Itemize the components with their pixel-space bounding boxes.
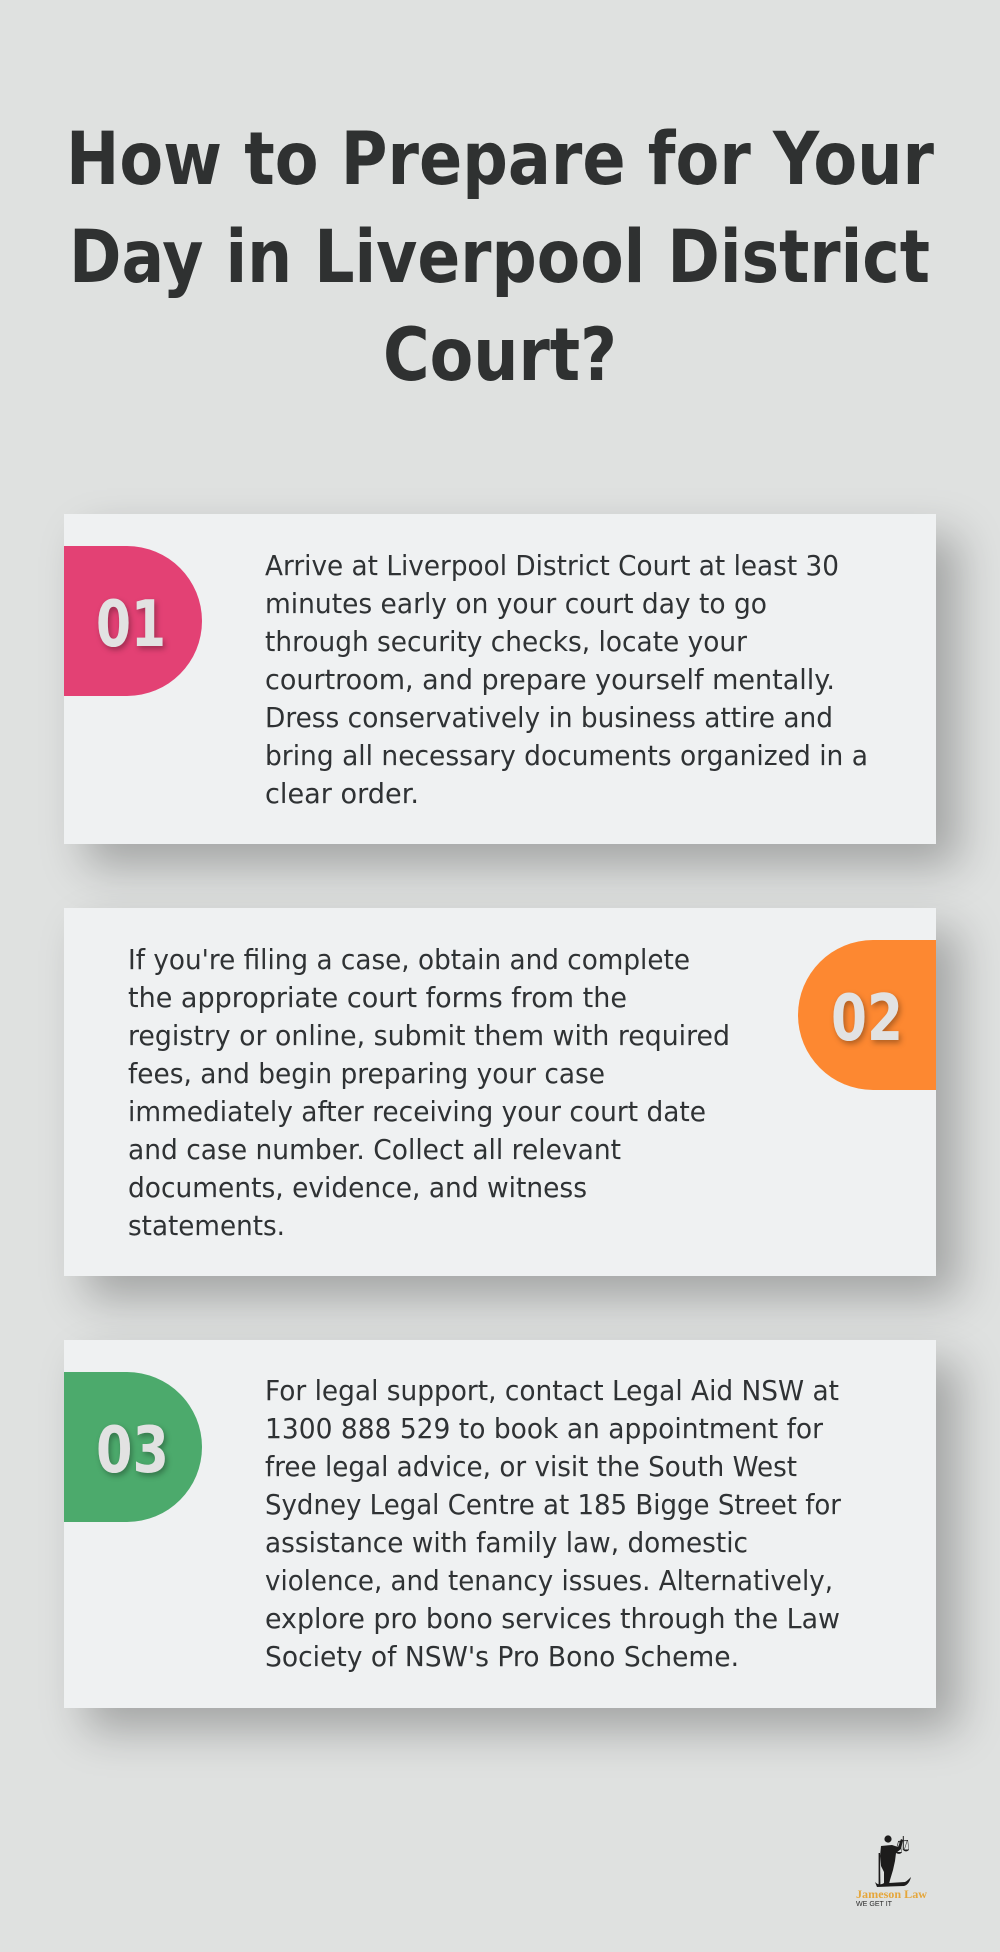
brand name: Jameson Law <box>856 1889 928 1901</box>
text block: step 03: 1300 888 529 to book an appointment for <box>265 1413 824 1445</box>
badge: 01: 01 <box>96 588 166 662</box>
text block: step 03: assistance with family law, domestic <box>265 1527 748 1559</box>
panel: step 03 <box>64 1340 936 1708</box>
panel: step 02 <box>64 908 936 1276</box>
text block: step 01 <box>265 550 868 810</box>
text block: step 02: documents, evidence, and witness <box>128 1172 587 1204</box>
text block: step 03: For legal support, contact Legal Aid NSW at <box>265 1375 839 1407</box>
badge: 03 <box>64 1372 202 1522</box>
text block: step 01: Dress conservatively in business attire and <box>265 702 833 734</box>
logo: Jameson Law <box>856 1835 928 1908</box>
text block: step 03: violence, and tenancy issues. Alternatively, <box>265 1565 833 1597</box>
text block: step 02: fees, and begin preparing your case <box>128 1058 605 1090</box>
text block: step 01: through security checks, locate your <box>265 626 748 658</box>
text block: step 03: free legal advice, or visit the South West <box>265 1451 797 1483</box>
text block: step 01: courtroom, and prepare yourself mentally. <box>265 664 835 696</box>
text block: step 01: bring all necessary documents organized in a <box>265 740 868 772</box>
icon: lady justice <box>875 1835 911 1887</box>
text block: step 01: Arrive at Liverpool District Court at least 30 <box>265 550 839 582</box>
text block: step 02: statements. <box>128 1210 285 1242</box>
tagline: WE GET IT <box>856 1899 892 1908</box>
badge: 02: 02 <box>831 982 903 1056</box>
text block: step 03: Society of NSW's Pro Bono Scheme. <box>265 1641 739 1673</box>
panel: step 01 <box>64 514 936 844</box>
text block: step 03: Sydney Legal Centre at 185 Bigge Street for <box>265 1489 842 1521</box>
text block: step 02: and case number. Collect all relevant <box>128 1134 621 1166</box>
text block: step 02: If you're filing a case, obtain and complete <box>128 944 690 976</box>
text block: step 02: immediately after receiving your court date <box>128 1096 706 1128</box>
badge: 03: 03 <box>96 1414 169 1488</box>
text block: step 02: registry or online, submit them with required <box>128 1020 730 1052</box>
title: Court? <box>383 313 617 398</box>
text block: step 02 <box>128 944 730 1242</box>
badge: 02 <box>798 940 936 1090</box>
title <box>66 120 934 398</box>
text block: step 03 <box>265 1375 842 1673</box>
text block: step 03: explore pro bono services through the Law <box>265 1603 840 1635</box>
text block: step 01: clear order. <box>265 778 419 810</box>
text block: step 01: minutes early on your court day to go <box>265 588 767 620</box>
text block: step 02: the appropriate court forms from the <box>128 982 627 1014</box>
badge: 01 <box>64 546 202 696</box>
